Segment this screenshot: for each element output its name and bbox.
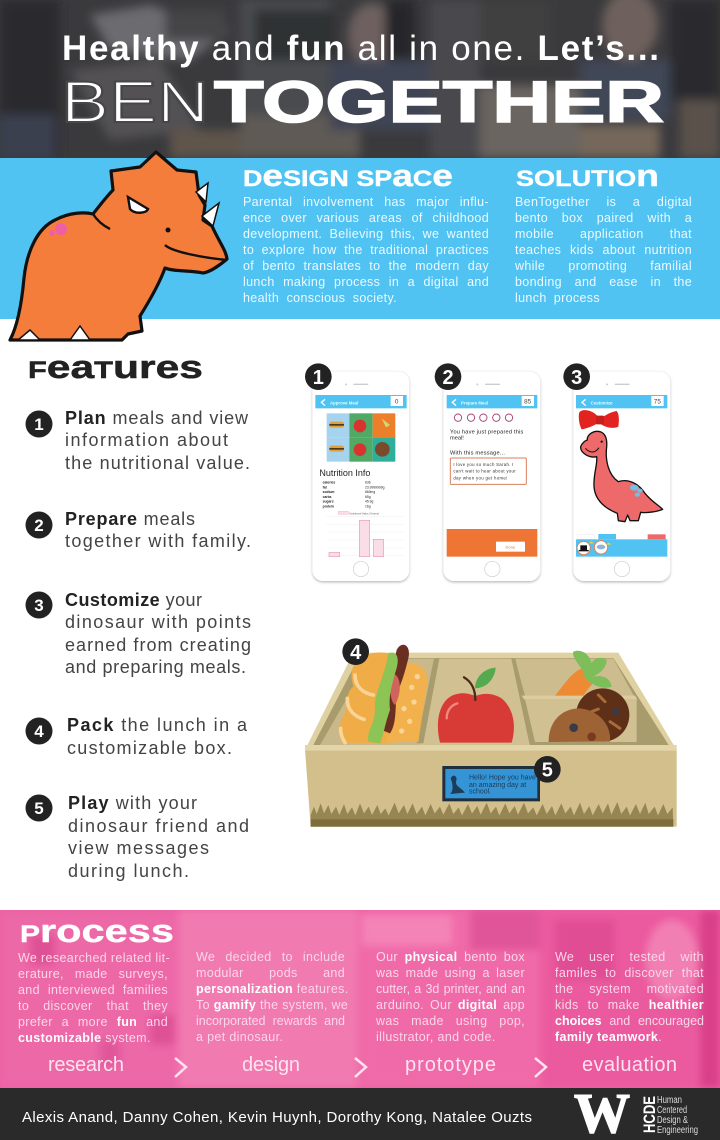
feature 2: prepare: 2 [34,516,44,535]
text: design space body: to explore how the traditional practices [243,243,489,257]
feature 3: customize: 3 [34,596,44,615]
phone 2: prepare meal: I love you so much Sarah. I [453,462,513,467]
footer band [0,1088,720,1140]
feature 3: customize: and preparing meals. [65,657,246,677]
mascot horn upper [196,183,208,202]
badge 5 [534,756,561,783]
feature 5: play: dinosaur friend and [68,816,249,836]
phone 1: approve meal: carbs [323,495,332,499]
cookies [549,688,629,742]
phone 1: approve meal: 860mg [365,490,375,494]
process step: design: To gamify the system, we [196,998,348,1012]
process step: prototype [376,950,525,1044]
feature 1: plan: information about [65,430,228,450]
feature 2: prepare: Prepare meals [65,509,195,529]
process step: prototype: arduino. Our digital app [376,998,525,1012]
process step: prototype: illustrator, and code. [376,1030,496,1044]
footer: team names: Alexis Anand, Danny Cohen, Kevin Huynh, Dorothy Kong, Natalee Ouzts [22,1109,532,1126]
badge 1 [305,363,332,390]
text: solution body: bonding and ease in the [515,275,692,289]
process step: evaluation: family teamwork. [555,1030,662,1044]
process step: evaluation [555,950,704,1044]
heading: process: Process [20,913,174,949]
label: prototype: prototype [405,1054,496,1076]
header tagline: Healthy and fun all in one. Let’s... [62,29,659,68]
process step: prototype: was made using a laser [376,966,525,980]
phone 1: approve meal: calories [323,480,335,484]
text: design space body: lunch making process in a digital and [243,275,489,289]
feature 5: play: view messages [68,838,209,858]
phone 2: prepare meal: Prepare Meal [461,400,488,405]
chevron 1 [175,1058,186,1077]
phone 1: approve meal: 636 [365,480,371,484]
feature 3: customize: dinosaur with points [65,612,251,632]
box rim and interior [305,653,677,750]
process step: prototype: Our physical bento box [376,950,525,964]
text: design space body: health conscious society. [243,291,397,305]
badge 3 [563,363,590,390]
bento box illustration [305,638,677,827]
badge 2: 2 [442,367,454,389]
process step: evaluation: choices and encouraged [555,1014,704,1028]
process step: evaluation: We user tested with [555,950,704,964]
process step: design [196,950,349,1044]
logo: HCDE: Centered [657,1105,687,1116]
mascot feet [18,326,90,340]
feature 4: pack: Pack the lunch in a [67,715,248,735]
phone 1: approve meal: 65g [365,495,371,499]
process step: research [18,951,170,1045]
message display: Hello! Hope you have [469,775,536,782]
phone 3: customize: 75 [654,398,661,405]
phone 1: approve meal: 0 [395,398,399,405]
text: design space body: of bento translates to the modern day [243,259,489,273]
process step: evaluation: kids to make healthier [555,998,704,1012]
phone 1: approve meal: 45.9g [365,500,373,504]
phone 2: prepare meal: can't wait to hear about your [453,469,516,474]
process step: research: customizable system. [18,1031,151,1045]
badge 3: 3 [571,367,582,389]
logo: HCDE: Human [657,1095,682,1106]
chevron 3 [535,1058,546,1077]
feature 5: play: Play with your [68,793,197,813]
phone 1: approve meal [312,372,409,582]
feature 4: pack [26,715,248,758]
text: design space body: ence over various areas of childhood [243,211,489,225]
phone 2: prepare meal: Done [506,544,516,549]
phone 1: approve meal: protein [323,505,334,509]
text: solution body: mobile application that [515,227,692,241]
feature 1: plan: 1 [34,415,44,434]
phone 1: approve meal: fat [323,485,328,489]
phone 2: prepare meal: 85 [524,398,532,405]
process step: research: to discover that they [18,999,168,1013]
feature 2: prepare: together with family. [65,531,251,551]
process step: prototype: was made using pop, [376,1014,525,1028]
text: design space body: development. Believing this, we wanted [243,227,489,241]
feature 3: customize: Customize your [65,590,202,610]
sandwich [339,645,427,743]
text: solution body: lunch process [515,291,600,305]
process step: design: incorporated rewards and [196,1014,345,1028]
logo: HCDE [641,1095,698,1136]
mascot horn lower [202,203,219,226]
feature list [26,408,251,881]
phone 2: prepare meal [443,372,540,582]
phone mockups [304,363,672,584]
feature 3: customize [26,590,251,677]
phone 2: prepare meal: With this message... [450,450,505,456]
header band with photo background [0,0,720,158]
phone 3: customize [573,372,670,582]
phone 1: approve meal: sodium [323,490,335,494]
chevron 2 [355,1058,366,1077]
process step: design: a pet dinosaur. [196,1030,283,1044]
message display: an amazing day at [469,782,526,789]
label: evaluation: evaluation [582,1054,677,1076]
label: research: research [48,1054,124,1076]
text: solution body: BenTogether is a digital [515,195,692,209]
message display [442,766,540,801]
message display: school. [469,789,491,796]
phone 1: approve meal: sugars [323,500,334,504]
apple [438,668,514,743]
box front panel [305,749,677,827]
badge 5: 5 [542,760,553,782]
text: solution body: bento box paired with a [515,211,692,225]
text: design space body [243,195,489,305]
feature 5: play: 5 [34,799,44,818]
text: solution body [515,195,692,305]
text: solution body: while promoting familial [515,259,692,273]
phone 2: prepare meal: meal! [450,436,464,442]
process step: design: personalization features. [196,982,349,996]
feature 2: prepare [26,509,251,551]
phone 2: prepare meal: day when you get home! [453,476,507,481]
mascot: orange triceratops [8,150,229,342]
phone 1: approve meal: Nutrition Info [319,468,370,478]
badge 1: 1 [313,367,324,389]
process step: research: prefer a more fun and [18,1015,168,1029]
process step: research: erature, made surveys, [18,967,168,981]
process step: research: and interviewed families [18,983,168,997]
text: design space body: Parental involvement has major influ- [243,195,489,209]
process step: research: We researched related lit- [18,951,170,965]
process step: evaluation: familes to discover that [555,966,704,980]
feature 5: play [26,793,249,881]
process labels and chevrons [48,1054,677,1078]
feature 4: pack: 4 [34,722,44,741]
title: BenTogether [61,70,664,130]
process step: design: We decided to include [196,950,345,964]
phone 2: prepare meal: You have just prepared this [450,429,524,435]
blue intro band [0,158,720,319]
feature 1: plan: the nutritional value. [65,453,250,473]
grass [311,802,673,827]
text: solution body: teaches kids about nutrition [515,243,692,257]
phone 1: approve meal: 16g [365,505,371,509]
phone 1: approve meal: Nutritional Value (Grams) [349,511,379,515]
mascot smile [165,245,227,260]
process step: prototype: cutter, a 3d printer, and an [376,982,525,996]
mascot pink spots [55,223,67,235]
label: design: design [242,1054,300,1076]
feature 1: plan [26,408,250,473]
badge 4: 4 [350,642,362,664]
feature 3: customize: earned from creating [65,635,251,655]
feature 4: pack: customizable box. [67,738,232,758]
phone 1: approve meal: Approve Meal [330,400,358,405]
process step: design: modular pods and [196,966,345,980]
feature 1: plan: Plan meals and view [65,408,249,428]
phone 1: approve meal: 23.9999999g [365,485,385,489]
carrot [555,651,612,696]
badge 4 [342,638,369,665]
logo: HCDE: Design & [657,1115,688,1126]
process step: evaluation: the system motivated [555,982,704,996]
feature 5: play: during lunch. [68,861,189,881]
process band with photo background [0,910,720,1088]
mascot eye [128,197,148,213]
phone 3: customize: Customize [591,400,613,405]
badge 2 [435,363,461,390]
